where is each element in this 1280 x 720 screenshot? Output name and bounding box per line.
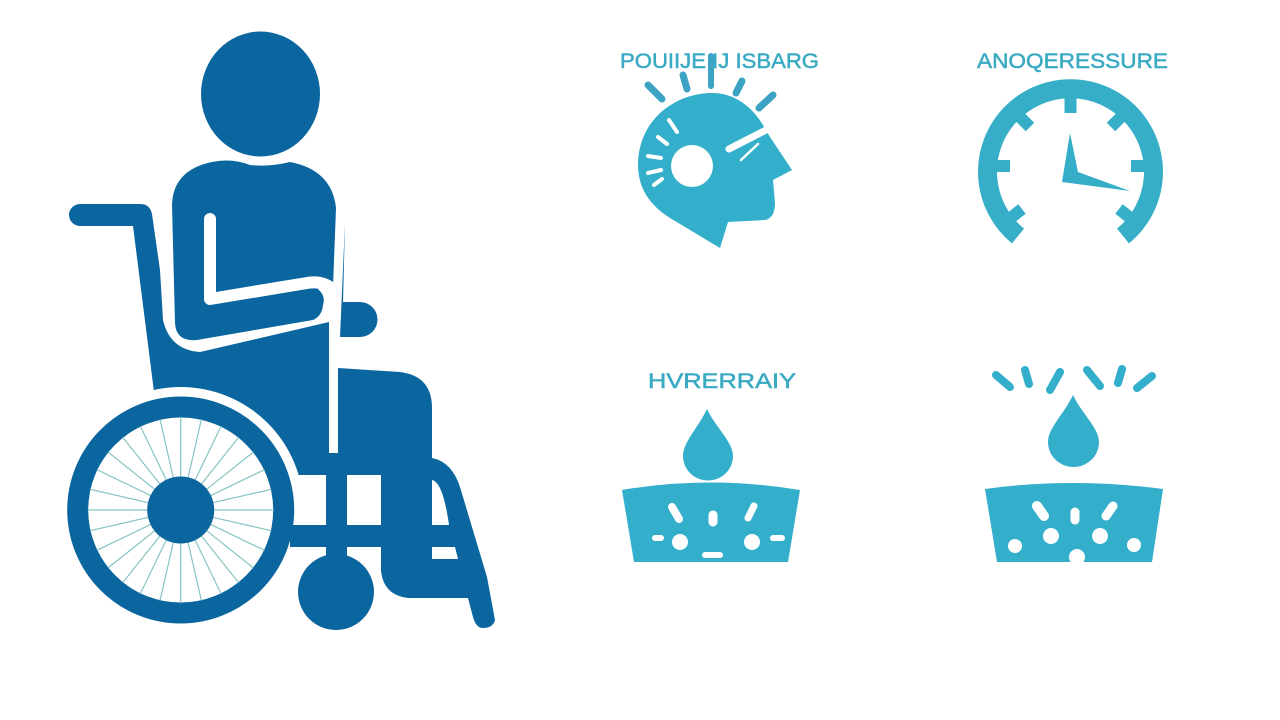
icon: person in wheelchair	[58, 32, 495, 633]
wheel clearance gap	[58, 387, 304, 633]
panel: humidity drop with label	[622, 370, 800, 562]
small caster wheel	[298, 554, 374, 630]
arm outline	[210, 219, 335, 299]
heading: humidity label: HVRERRAIY	[648, 370, 796, 393]
icon: basin	[985, 483, 1163, 562]
icon: head profile	[638, 93, 792, 248]
frame window left	[347, 475, 381, 525]
basin marks	[655, 506, 782, 555]
icon: gauge needle	[1062, 133, 1130, 191]
wheel spokes	[88, 417, 274, 603]
torso and forearm	[172, 161, 336, 340]
wheel hub	[147, 476, 214, 544]
footrest window	[432, 547, 458, 559]
icon: gauge dial	[987, 89, 1153, 236]
panel: pressure gauge with label	[977, 50, 1168, 236]
large wheel rim	[78, 407, 284, 613]
icon: water drop	[683, 409, 733, 480]
leg, footrest and front frame	[290, 368, 495, 628]
icon: rays above drop	[996, 369, 1152, 390]
hand and armrest	[340, 223, 378, 337]
icon: basin	[622, 482, 800, 562]
basin marks	[1008, 506, 1141, 565]
panel: drop with rays icon	[985, 369, 1163, 565]
backrest and handle	[69, 204, 329, 475]
icon: water drop	[1048, 395, 1099, 467]
icon: head circle and marks	[648, 120, 768, 187]
panel: head icon with label	[620, 50, 819, 248]
heading: gauge label: ANOQERESSURE	[977, 50, 1168, 73]
heading: head icon label: POUIIJE IJ ISBARG	[620, 50, 819, 73]
frame window right	[432, 480, 449, 525]
person head	[201, 32, 320, 156]
icon: radiating rays	[648, 56, 773, 108]
